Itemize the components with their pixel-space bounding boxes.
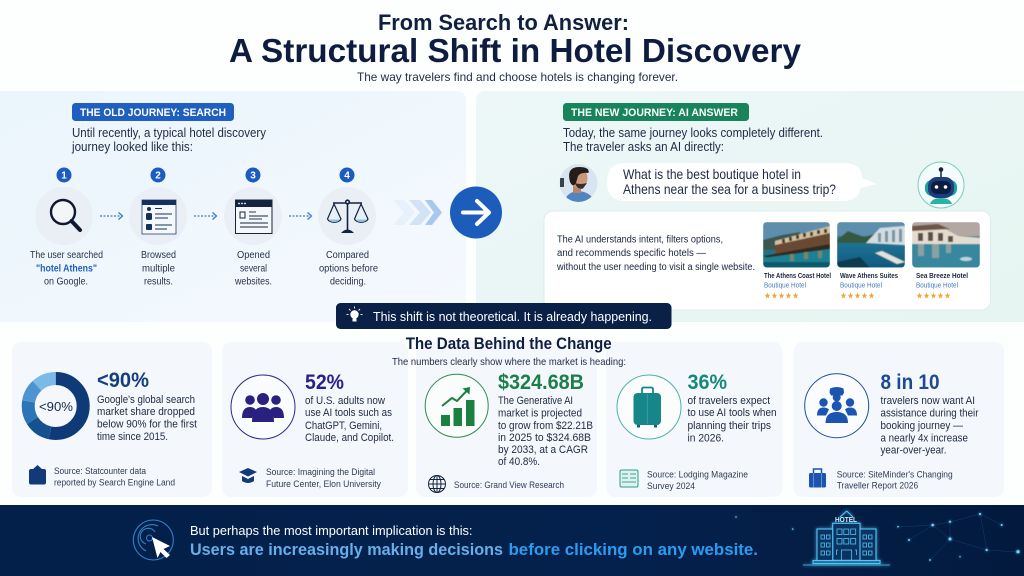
panel: stat travelers: [606, 342, 782, 497]
arrow: step 2 to 3: [194, 212, 216, 220]
stat description: a nearly 4x increase: [880, 432, 968, 444]
source text: reported by Search Engine Land: [54, 478, 175, 488]
step 4: compare: [318, 168, 378, 288]
chart: donut: [28, 378, 83, 434]
heading: data section: The numbers clearly show where the market is heading:: [392, 356, 626, 368]
icon: source briefcase: [29, 465, 46, 484]
step 1: search: [30, 168, 103, 288]
stat description: market is projected: [498, 408, 582, 420]
new journey intro text: Today, the same journey looks completely different.: [563, 125, 823, 140]
AI answer text: [556, 234, 755, 273]
hotel sign: HOTEL: [835, 515, 857, 524]
step 1: search: "hotel Athens": [36, 264, 97, 274]
source text: Source: Lodging Magazine: [647, 470, 748, 480]
panel: old journey: [0, 91, 466, 322]
hotel card: Sea Breeze Hotel: [912, 222, 980, 300]
stat description: assistance during their: [880, 408, 979, 420]
step 1: search: The user searched: [30, 250, 103, 261]
icon: glowing hotel: [803, 511, 890, 565]
step 1: search: 1: [61, 170, 67, 182]
stat value: $324.68B: [498, 371, 584, 394]
hotel card: The Athens Coast Hotel: [763, 222, 831, 300]
source text: Source: Imagining the Digital: [266, 467, 375, 477]
stat description: [880, 395, 979, 456]
badge: old journey: [72, 103, 234, 121]
step 2: browse results: 2: [155, 170, 161, 182]
step 2: browse results: [129, 168, 187, 288]
step 4: compare: options before: [319, 264, 378, 274]
network decoration: [735, 513, 1020, 561]
stat description: time since 2015.: [97, 431, 168, 443]
source text: [266, 467, 381, 489]
source text: Source: Grand View Research: [454, 480, 564, 490]
panel: stat search share: [12, 342, 212, 497]
panel: stat US adults: [222, 342, 408, 497]
hotel card: Sea Breeze Hotel: Sea Breeze Hotel: [916, 271, 968, 280]
stat description: to grow from $22.21B: [498, 420, 593, 432]
panel: stat booking journey: [794, 342, 1004, 497]
step 3: open websites: [224, 168, 282, 288]
source text: [647, 470, 748, 491]
AI answer text: without the user needing to visit a single website.: [556, 262, 755, 273]
icon: survey document: [620, 470, 638, 487]
callout: shift is happening: This shift is not theoretical. It is already happening.: [373, 309, 652, 324]
stat description: planning their trips: [688, 420, 771, 432]
hotel card: Sea Breeze Hotel: ★★★★★: [916, 290, 951, 300]
stat description: below 90% for the first: [97, 418, 197, 430]
stat description: use AI tools such as: [305, 407, 392, 419]
badge: new journey: [563, 103, 749, 121]
source text: Future Center, Elon University: [266, 479, 381, 489]
stat description: [498, 395, 593, 468]
stat description: travelers now want AI: [880, 395, 975, 407]
icon: growth chart: [425, 374, 488, 437]
stat description: market share dropped: [97, 406, 195, 418]
hotel card: Wave Athens Suites: Boutique Hotel: [840, 280, 882, 290]
step 4: compare: 4: [344, 170, 350, 182]
old journey intro text: journey looked like this:: [71, 139, 193, 154]
stat value: 52%: [305, 371, 344, 394]
stat description: by 2033, at a CAGR: [498, 444, 588, 456]
footer text: before clicking on any website.: [508, 540, 758, 559]
stat description: ChatGPT, Gemini,: [305, 420, 382, 432]
title: A Structural Shift in Hotel Discovery: [229, 32, 802, 69]
hotel card: The Athens Coast Hotel: ★★★★★: [764, 290, 799, 300]
stat description: [305, 395, 394, 444]
new journey intro text: [563, 125, 823, 154]
card: AI answer: [544, 211, 990, 310]
hotel card: Sea Breeze Hotel: Boutique Hotel: [916, 280, 958, 290]
panel: new journey: [476, 91, 1024, 322]
step 2: browse results: results.: [144, 276, 173, 288]
subtitle: The way travelers find and choose hotels is changing forever.: [357, 70, 678, 84]
arrow: step 3 to 4: [289, 212, 312, 220]
source text: Traveller Report 2026: [837, 480, 918, 490]
badge: old journey: THE OLD JOURNEY: SEARCH: [80, 107, 226, 119]
stat description: [97, 394, 197, 443]
stat description: of 40.8%.: [498, 456, 540, 468]
chart: donut: <90%: [39, 399, 73, 414]
old journey intro text: [71, 125, 266, 154]
hotel card: Wave Athens Suites: ★★★★★: [840, 290, 875, 300]
stat description: of U.S. adults now: [305, 395, 385, 407]
step 3: open websites: several: [240, 264, 267, 274]
stat description: in 2026.: [688, 432, 724, 444]
icon: AI robot: [918, 162, 964, 208]
icon: people: [231, 375, 295, 439]
heading: data section: [392, 334, 626, 368]
speech bubble: question: Athens near the sea for a business trip?: [623, 181, 836, 197]
step 2: browse results: multiple: [142, 264, 175, 274]
stat description: Claude, and Copilot.: [305, 432, 394, 444]
stat value: <90%: [97, 369, 149, 392]
heading: data section: The Data Behind the Change: [406, 334, 612, 353]
speech bubble: question: What is the best boutique hotel in: [623, 166, 801, 182]
stat description: of travelers expect: [688, 395, 770, 407]
icon: source luggage: [809, 469, 826, 488]
footer text: Users are increasingly making decisions: [190, 540, 503, 559]
stat description: in 2025 to $324.68B: [498, 432, 591, 444]
source text: [837, 470, 953, 490]
hotel card: The Athens Coast Hotel: Boutique Hotel: [764, 280, 806, 290]
title: [229, 10, 802, 69]
hotel card: The Athens Coast Hotel: The Athens Coast Hotel: [764, 271, 831, 280]
footer banner: [0, 505, 1024, 576]
icon: graduation cap: [239, 468, 257, 483]
panel: stat generative AI: [416, 342, 597, 497]
step 4: compare: deciding.: [330, 276, 366, 288]
step 4: compare: Compared: [326, 250, 369, 261]
source text: [54, 466, 175, 488]
step 3: open websites: websites.: [234, 276, 272, 288]
hotel card: Wave Athens Suites: Wave Athens Suites: [840, 271, 898, 280]
icon: cursor click: [133, 520, 173, 560]
icon: suitcase: [617, 375, 681, 439]
speech bubble: question: [607, 163, 877, 201]
source text: Source: SiteMinder's Changing: [837, 470, 953, 480]
title: From Search to Answer:: [378, 10, 629, 35]
callout: shift is happening: [336, 303, 672, 329]
stat description: year-over-year.: [880, 444, 946, 456]
icon: traveler avatar: [559, 163, 599, 203]
source text: Source: Statcounter data: [54, 466, 146, 476]
source text: Survey 2024: [647, 481, 695, 491]
AI answer text: The AI understands intent, filters options,: [557, 234, 723, 246]
new journey intro text: The traveler asks an AI directly:: [563, 139, 724, 154]
icon: globe: [428, 476, 446, 492]
step 3: open websites: 3: [250, 170, 256, 182]
stat description: Google's global search: [97, 394, 195, 406]
footer text: [190, 523, 758, 559]
stat description: [688, 395, 776, 444]
arrow: step 1 to 2: [100, 212, 122, 220]
badge: new journey: THE NEW JOURNEY: AI ANSWER: [571, 107, 738, 119]
step 2: browse results: Browsed: [141, 250, 176, 261]
arrow: main transition button: [450, 186, 502, 238]
stat description: to use AI tools when: [688, 407, 776, 419]
step 1: search: on Google.: [44, 276, 88, 288]
footer text: But perhaps the most important implication is this:: [190, 523, 472, 538]
step 3: open websites: Opened: [237, 250, 270, 261]
stat value: 8 in 10: [880, 371, 940, 394]
AI answer text: and recommends specific hotels —: [557, 248, 706, 259]
hotel card: Wave Athens Suites: [837, 222, 905, 300]
stat value: 36%: [688, 371, 727, 394]
stat description: booking journey —: [880, 420, 963, 432]
stat description: The Generative AI: [498, 395, 573, 407]
arrow: chevrons: [393, 200, 442, 225]
old journey intro text: Until recently, a typical hotel discovery: [72, 125, 266, 140]
icon: travelers group: [805, 374, 869, 438]
